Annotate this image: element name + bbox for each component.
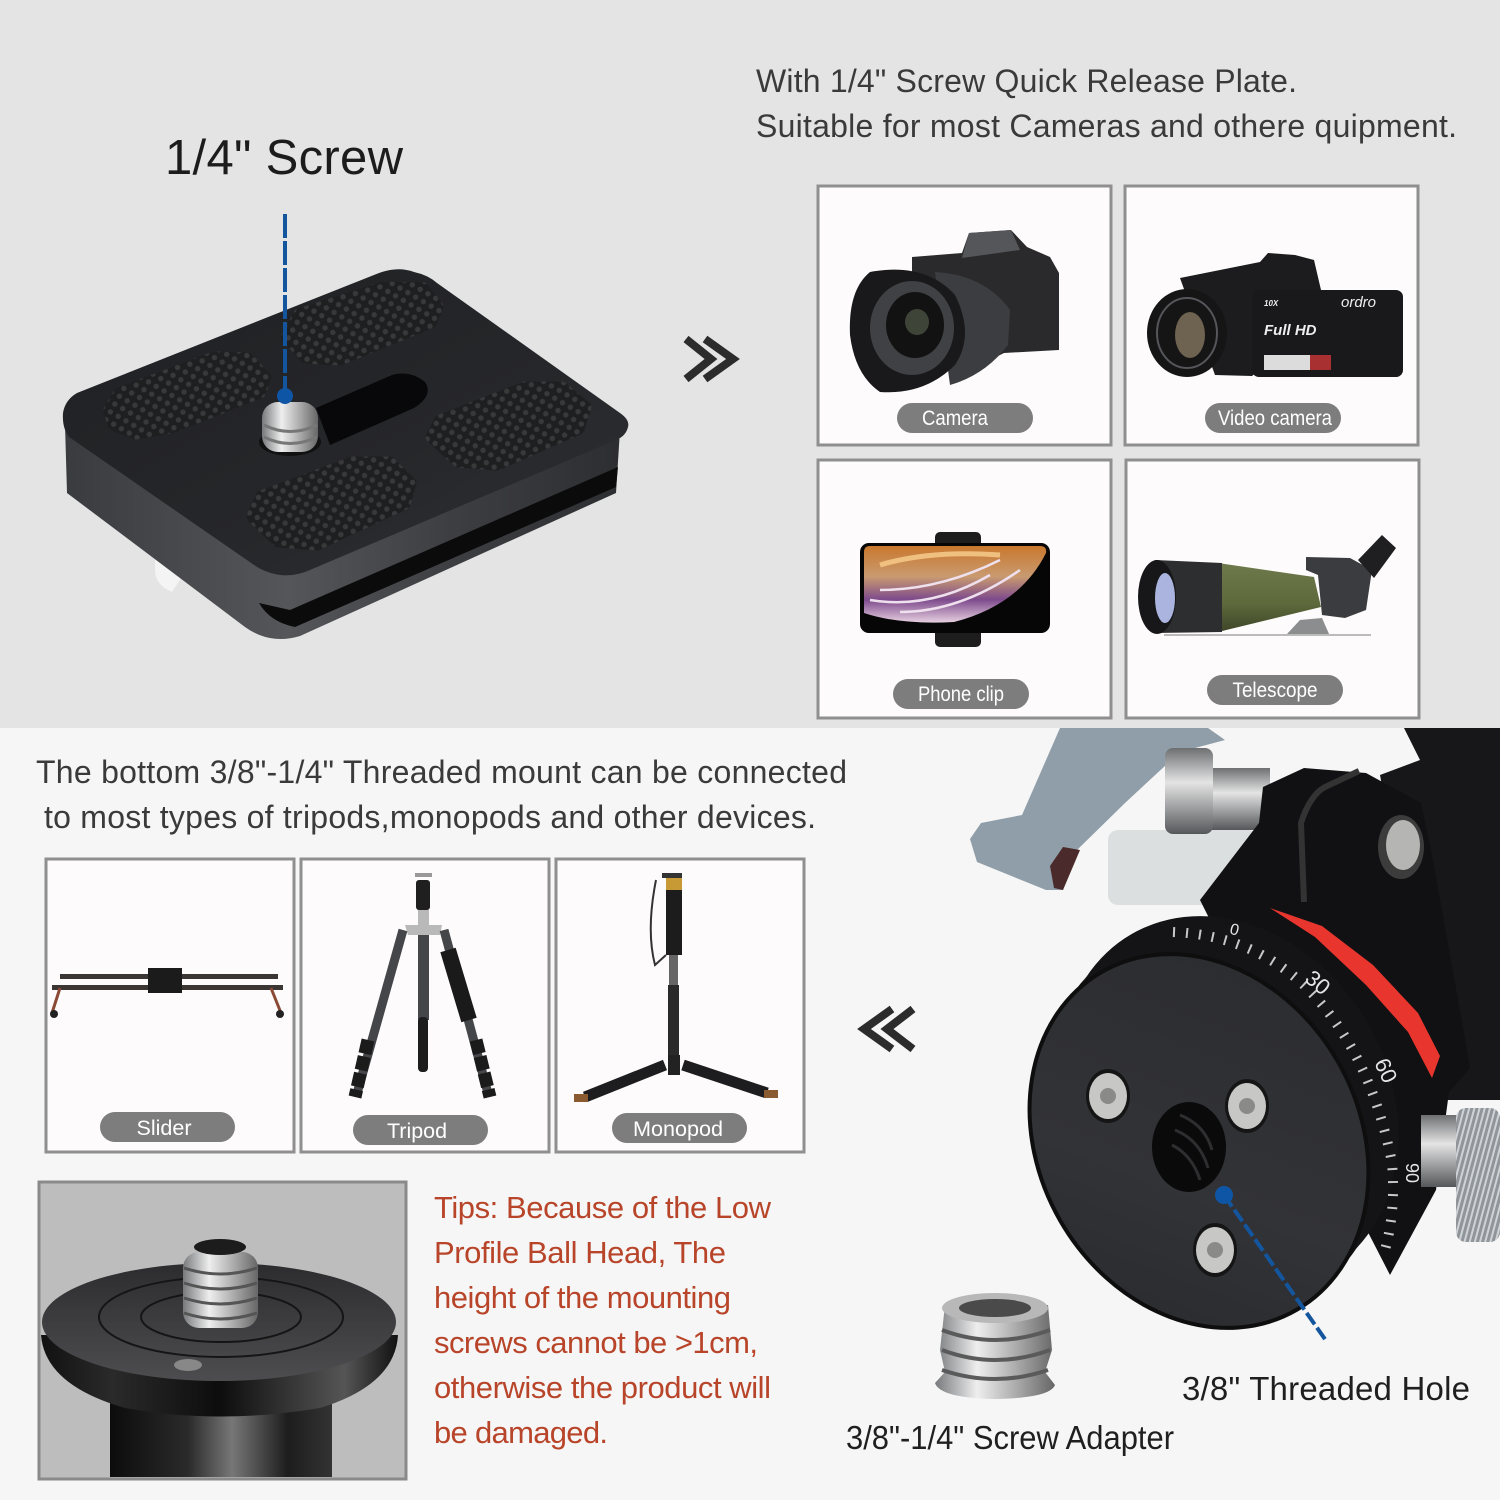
text: tips warning bbox=[434, 1190, 772, 1450]
dark rear body bbox=[1380, 728, 1500, 1100]
phone clip illustration bbox=[860, 532, 1050, 647]
label pill: Slider bbox=[100, 1112, 235, 1142]
lever tip bbox=[1050, 847, 1080, 890]
card: slider bbox=[46, 859, 294, 1152]
telescope illustration bbox=[1138, 535, 1396, 636]
leader line: threaded hole bbox=[1215, 1186, 1327, 1342]
video camera illustration: 10X bbox=[1264, 299, 1279, 308]
rubber pad bbox=[431, 387, 586, 465]
text: tips warning: Profile Ball Head, The bbox=[434, 1235, 726, 1270]
top background panel bbox=[0, 0, 1500, 728]
red band bbox=[1270, 908, 1440, 1078]
degree markings: 60 bbox=[1369, 1054, 1402, 1087]
card: tripod bbox=[301, 859, 549, 1152]
text: mount description: to most types of tripods,monopods and other devices. bbox=[44, 799, 816, 835]
text: mount description bbox=[36, 754, 847, 835]
rubber pad bbox=[287, 287, 438, 360]
plate slot bbox=[316, 374, 428, 445]
mounting screw bbox=[1193, 1223, 1237, 1277]
text: tips warning: screws cannot be >1cm, bbox=[434, 1325, 758, 1360]
rubber pad bbox=[252, 462, 411, 545]
screw adapter bbox=[935, 1293, 1055, 1399]
label pill: Video camera: Video camera bbox=[1218, 407, 1332, 430]
disc face bbox=[963, 892, 1435, 1390]
tripod illustration bbox=[355, 873, 490, 1097]
degree markings: 90 bbox=[1402, 1163, 1422, 1183]
card: phone clip bbox=[818, 460, 1111, 718]
arrow: left chevrons bbox=[864, 1009, 913, 1049]
label pill: Tripod bbox=[353, 1115, 488, 1145]
lever rod bbox=[1165, 748, 1270, 834]
threaded hole bbox=[1152, 1102, 1226, 1192]
card: monopod bbox=[556, 859, 804, 1152]
label pill: Telescope: Telescope bbox=[1232, 679, 1318, 702]
bottom background panel bbox=[0, 728, 1500, 1500]
rubber band bbox=[1301, 771, 1359, 902]
text: compatibility intro: Suitable for most Cameras and othere quipment. bbox=[756, 108, 1457, 144]
label: threaded hole: 3/8" Threaded Hole bbox=[1182, 1370, 1470, 1407]
arrow: right chevrons bbox=[686, 339, 733, 379]
screw bbox=[259, 402, 321, 456]
degree ticks bbox=[1173, 932, 1393, 1250]
label pill: Telescope bbox=[1207, 675, 1343, 705]
text: tips warning: height of the mounting bbox=[434, 1280, 731, 1315]
mounting screw bbox=[1086, 1069, 1130, 1123]
label pill: Monopod: Monopod bbox=[633, 1118, 723, 1141]
heading: 1/4 inch screw: 1/4" Screw bbox=[165, 131, 404, 185]
mounting screw bbox=[1225, 1079, 1269, 1133]
quick release plate product bbox=[63, 269, 628, 639]
label pill: Tripod: Tripod bbox=[387, 1120, 447, 1143]
label pill: Video camera bbox=[1205, 403, 1341, 433]
leader line: screw bbox=[277, 214, 293, 404]
label pill: Camera: Camera bbox=[922, 407, 988, 430]
degree markings: 30 bbox=[1300, 965, 1335, 1000]
card: camera bbox=[818, 186, 1111, 445]
text: compatibility intro bbox=[756, 63, 1457, 144]
degree markings: 0 bbox=[1228, 921, 1241, 940]
card: video camera bbox=[1125, 186, 1418, 445]
arm bbox=[1200, 768, 1470, 1275]
camera illustration bbox=[850, 230, 1059, 392]
label pill: Phone clip: Phone clip bbox=[918, 683, 1004, 706]
degree markings bbox=[1228, 921, 1422, 1183]
video camera illustration: ordro bbox=[1341, 294, 1376, 311]
barrel bbox=[978, 854, 1465, 1371]
blurred background grip bbox=[1108, 830, 1258, 905]
text: mount description: The bottom 3/8"-1/4" Threaded mount can be connected bbox=[36, 754, 847, 790]
text: tips warning: Tips: Because of the Low bbox=[434, 1190, 772, 1225]
label pill: Slider: Slider bbox=[136, 1117, 192, 1140]
cap screw bbox=[1378, 815, 1424, 879]
rubber pad bbox=[109, 357, 266, 434]
slider illustration bbox=[50, 968, 284, 1018]
text: compatibility intro: With 1/4" Screw Quick Release Plate. bbox=[756, 63, 1297, 99]
label pill: Monopod bbox=[612, 1113, 747, 1143]
video camera illustration bbox=[1147, 253, 1403, 377]
label: screw adapter: 3/8"-1/4" Screw Adapter bbox=[846, 1419, 1174, 1456]
ball head product bbox=[963, 728, 1500, 1390]
label pill: Camera bbox=[897, 403, 1033, 433]
lever bbox=[970, 728, 1225, 890]
text: tips warning: be damaged. bbox=[434, 1415, 608, 1450]
text: tips warning: otherwise the product will bbox=[434, 1370, 771, 1405]
monopod illustration bbox=[574, 873, 778, 1102]
card: telescope bbox=[1126, 460, 1419, 718]
video camera illustration: Full HD bbox=[1264, 322, 1317, 339]
label pill: Phone clip bbox=[893, 679, 1029, 709]
photo: ball head base screw bbox=[39, 1182, 406, 1479]
right knob bbox=[1421, 1108, 1500, 1242]
